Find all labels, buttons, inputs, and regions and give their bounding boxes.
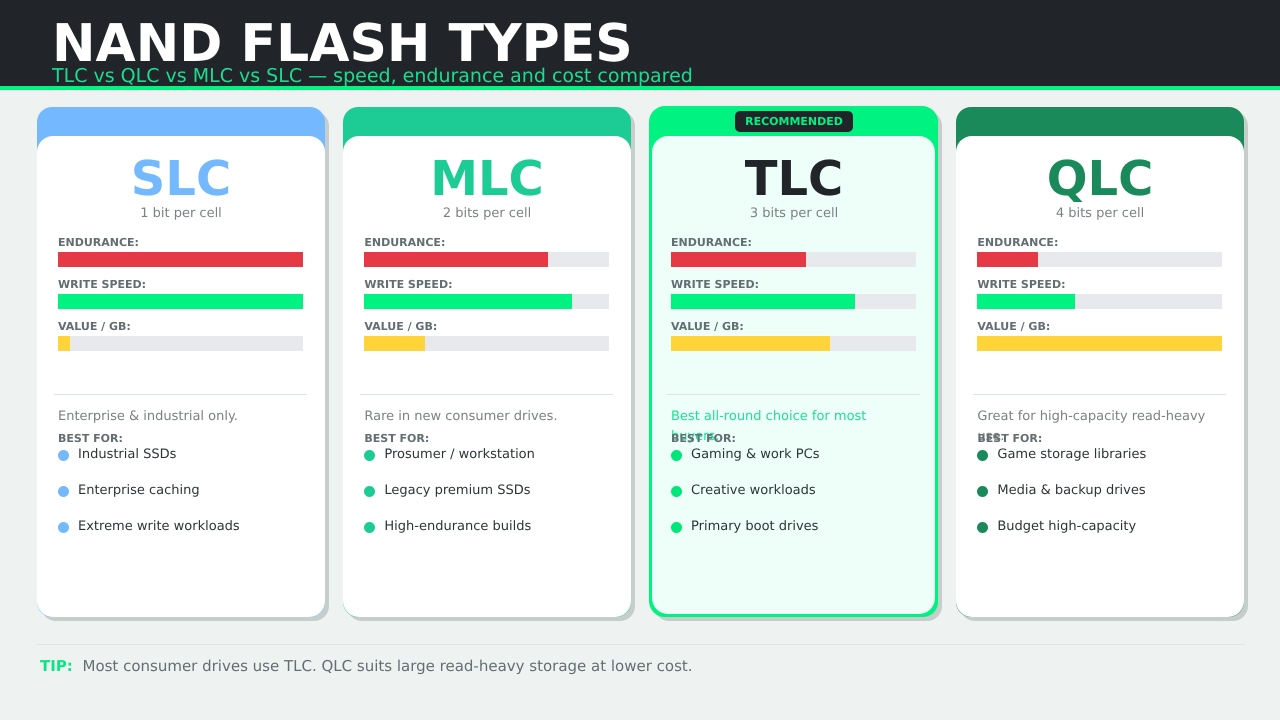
QLC endurance label: ENDURANCE: (977, 236, 1058, 249)
QLC write speed bar (977, 294, 1222, 309)
SLC heading: SLC (131, 151, 231, 207)
TLC write speed bar (671, 294, 916, 309)
title: NAND FLASH TYPES (52, 14, 633, 74)
QLC value bar (977, 336, 1222, 351)
MLC endurance label: ENDURANCE: (364, 236, 445, 249)
SLC write speed bar (58, 294, 303, 309)
MLC heading: MLC (430, 151, 544, 207)
MLC endurance bar (364, 252, 609, 267)
QLC best for label: BEST FOR: (977, 432, 1042, 445)
tip text: Most consumer drives use TLC. QLC suits large read-heavy storage at lower cost. (82, 657, 693, 675)
MLC best for label: BEST FOR: (364, 432, 429, 445)
tip label: TIP: (40, 657, 73, 675)
header band (0, 0, 1280, 90)
TLC outer green frame (649, 106, 938, 617)
SLC item 1: Industrial SSDs (78, 447, 176, 462)
recommended badge (735, 111, 853, 132)
MLC write speed label: WRITE SPEED: (364, 278, 452, 291)
TLC write speed label: WRITE SPEED: (671, 278, 759, 291)
MLC value bar (364, 336, 609, 351)
TLC value bar (671, 336, 916, 351)
SLC bits per cell: 1 bit per cell (140, 206, 222, 220)
QLC item 2: Media & backup drives (997, 483, 1146, 498)
MLC item 1: Prosumer / workstation (384, 447, 535, 462)
TLC item 1: Gaming & work PCs (691, 447, 820, 462)
TLC note: Best all-round choice for most buyers. (671, 409, 866, 444)
QLC endurance bar (977, 252, 1222, 267)
panel: QLC (956, 107, 1244, 617)
subtitle: TLC vs QLC vs MLC vs SLC — speed, endurance and cost compared (52, 65, 693, 87)
QLC write speed label: WRITE SPEED: (977, 278, 1065, 291)
TLC heading: TLC (745, 151, 843, 207)
panel: TLC recommended (650, 107, 938, 617)
TLC endurance label: ENDURANCE: (671, 236, 752, 249)
SLC best for label: BEST FOR: (58, 432, 123, 445)
SLC write speed label: WRITE SPEED: (58, 278, 146, 291)
MLC bits per cell: 2 bits per cell (443, 206, 531, 220)
MLC write speed bar (364, 294, 609, 309)
SLC value bar (58, 336, 303, 351)
panel: SLC (37, 107, 325, 617)
MLC value label: VALUE / GB: (364, 320, 437, 333)
QLC bits per cell: 4 bits per cell (1056, 206, 1144, 220)
MLC item 2: Legacy premium SSDs (384, 483, 531, 498)
QLC value label: VALUE / GB: (977, 320, 1050, 333)
tip footer (40, 657, 693, 675)
SLC value label: VALUE / GB: (58, 320, 131, 333)
SLC item 2: Enterprise caching (78, 483, 200, 498)
TLC item 3: Primary boot drives (691, 519, 818, 534)
SLC endurance bar (58, 252, 303, 267)
MLC note: Rare in new consumer drives. (364, 409, 558, 424)
panel: MLC (343, 107, 631, 617)
QLC heading: QLC (1047, 151, 1153, 207)
TLC endurance bar (671, 252, 916, 267)
QLC note: Great for high-capacity read-heavy use. (977, 409, 1205, 444)
QLC item 1: Game storage libraries (997, 447, 1146, 462)
TLC item 2: Creative workloads (691, 483, 816, 498)
TLC value label: VALUE / GB: (671, 320, 744, 333)
recommended badge: RECOMMENDED (745, 115, 843, 128)
MLC item 3: High-endurance builds (384, 519, 531, 534)
TLC best for label: BEST FOR: (671, 432, 736, 445)
QLC item 3: Budget high-capacity (997, 519, 1136, 534)
SLC endurance label: ENDURANCE: (58, 236, 139, 249)
SLC item 3: Extreme write workloads (78, 519, 240, 534)
TLC bits per cell: 3 bits per cell (750, 206, 838, 220)
SLC note: Enterprise & industrial only. (58, 409, 238, 424)
